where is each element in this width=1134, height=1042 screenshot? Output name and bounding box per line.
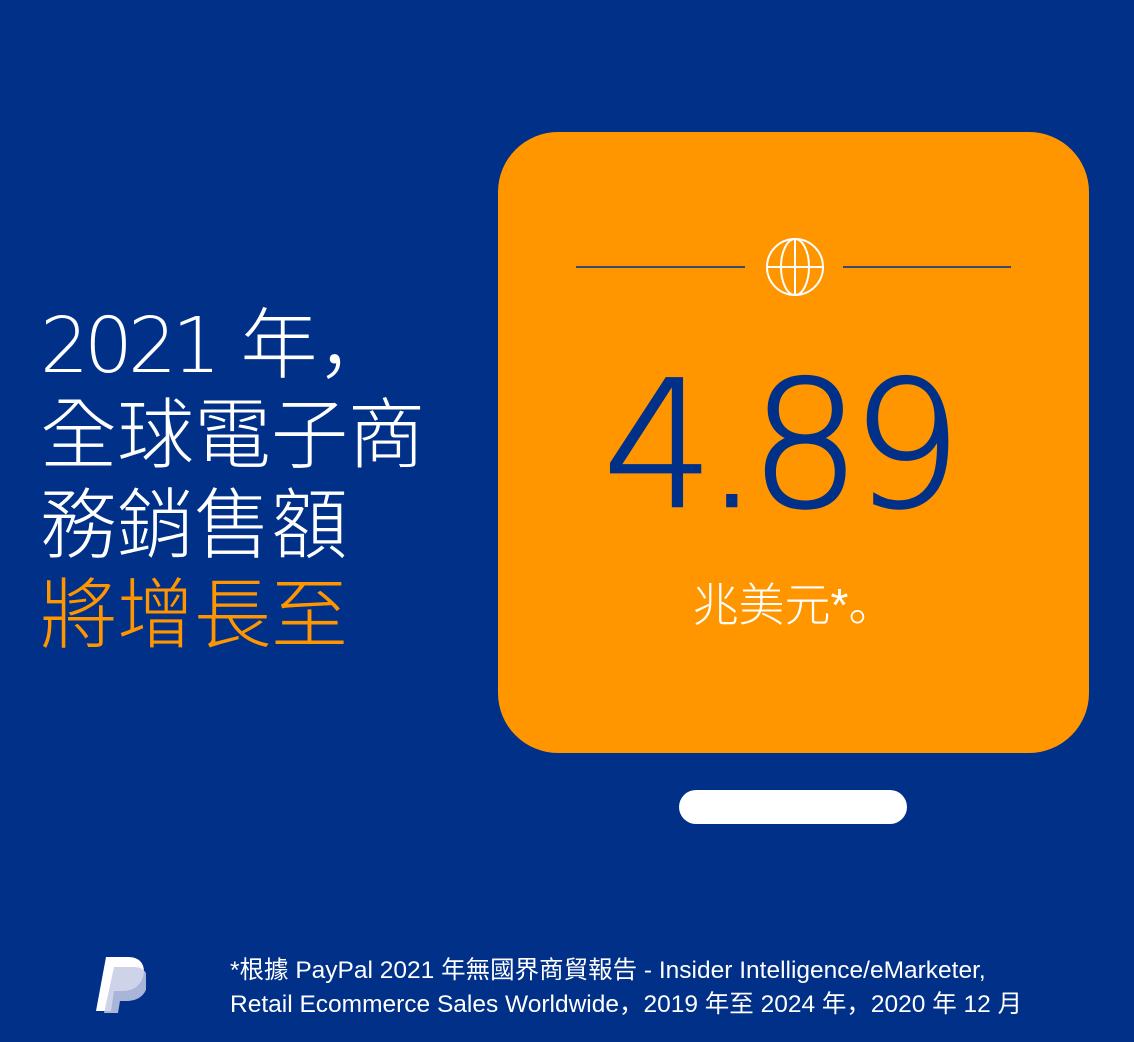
title: 全球電子商 [40, 392, 425, 481]
footnote: Retail Ecommerce Sales Worldwide，2019 年至 2024 年，2020 年 12 月 [230, 985, 1022, 1020]
title: 將增長至 [40, 572, 348, 661]
big number: 4.89 [603, 345, 952, 548]
panel: stat card [498, 132, 1089, 753]
title: 務銷售額 [40, 482, 348, 571]
divider with globe icon [576, 238, 1011, 296]
stand bar [679, 790, 907, 824]
footnote [230, 957, 1022, 1020]
unit text: 兆美元*。 [693, 569, 894, 635]
icon: PayPal logo [96, 957, 146, 1013]
title [40, 284, 425, 661]
footnote: *根據 PayPal 2021 年無國界商貿報告 - Insider Intelligence/eMarketer, [230, 957, 986, 984]
title: 2021 年， [40, 284, 394, 395]
